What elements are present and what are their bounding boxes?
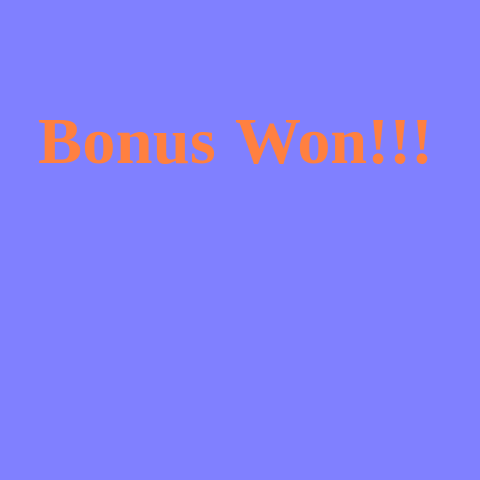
title: Bonus Won!!! [38,105,433,178]
